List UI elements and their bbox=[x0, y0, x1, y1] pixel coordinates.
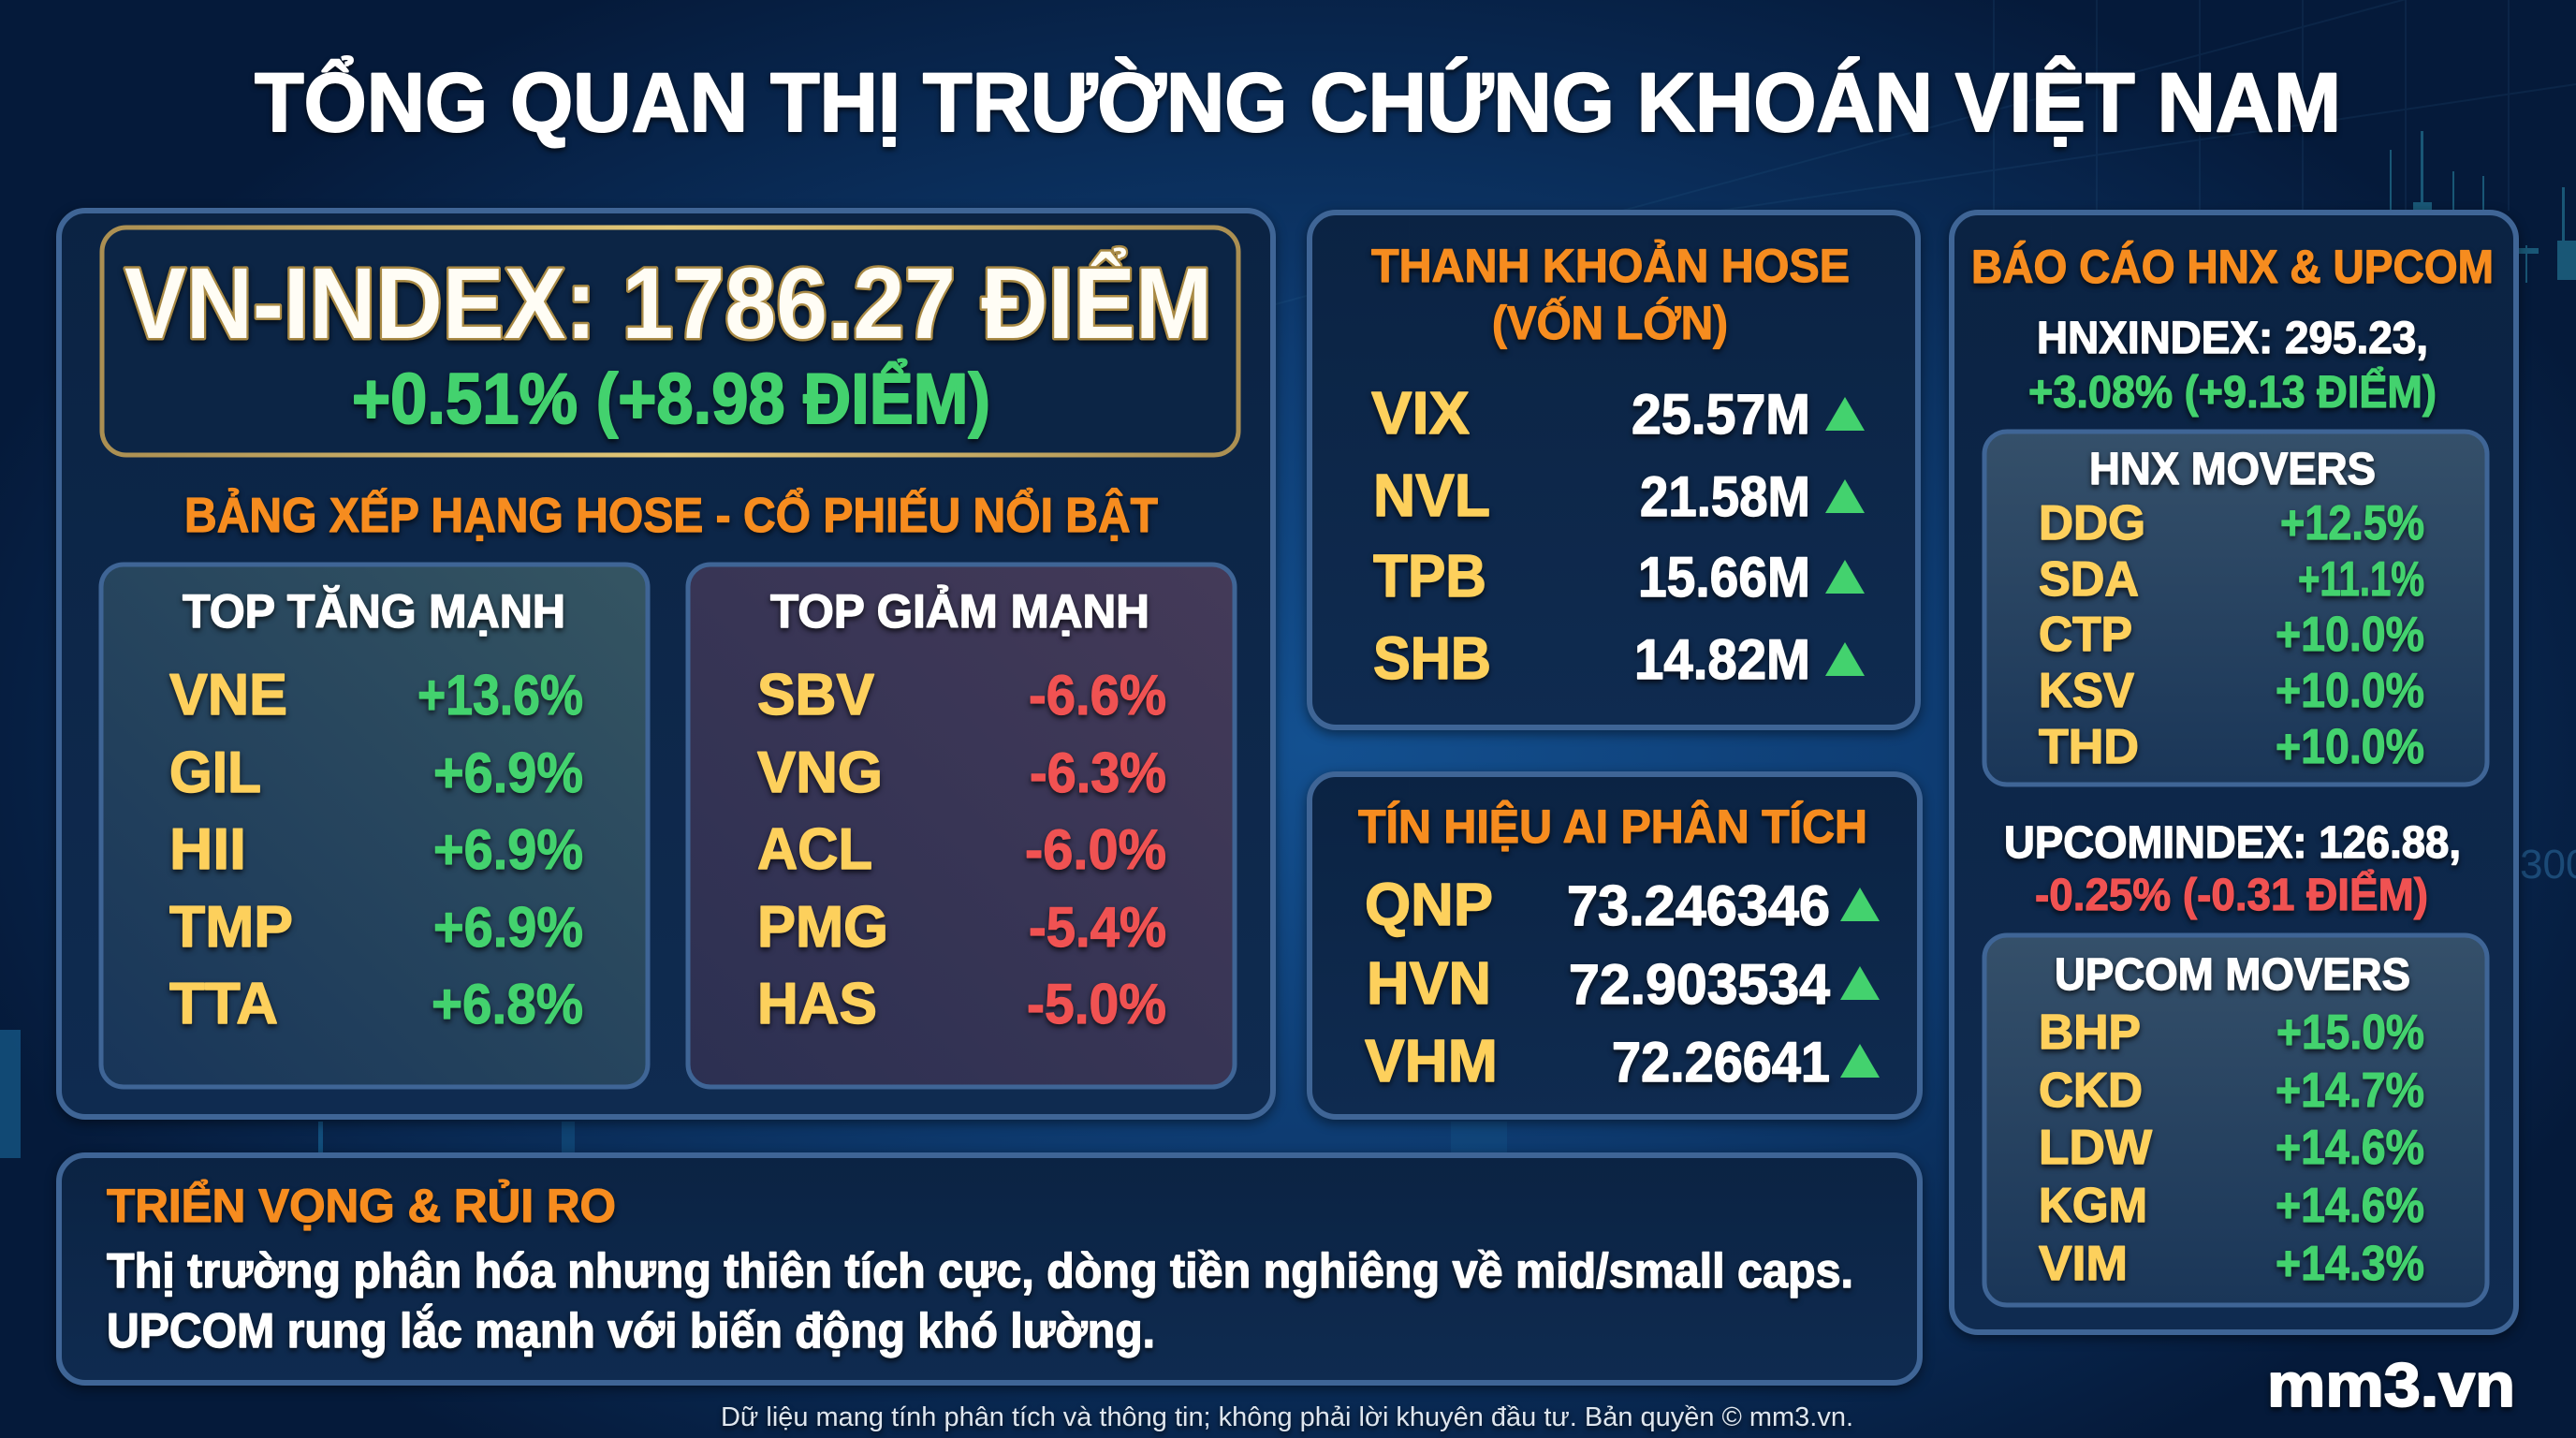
row SDA: SDA bbox=[2039, 552, 2139, 607]
heading: liquidity: (VỐN LỚN) bbox=[1492, 296, 1728, 349]
heading: HNX movers: HNX MOVERS bbox=[2089, 445, 2376, 494]
heading: outlook: TRIỂN VỌNG & RỦI RO bbox=[107, 1179, 616, 1232]
row TPB: TPB bbox=[1373, 542, 1486, 609]
row KGM: +14.6% bbox=[2276, 1179, 2424, 1233]
row LDW: +14.6% bbox=[2276, 1121, 2424, 1175]
row HII: HII bbox=[169, 817, 246, 882]
row BHP bbox=[2039, 1005, 2424, 1060]
row HVN bbox=[1367, 949, 1880, 1017]
row ACL: -6.0% bbox=[1025, 818, 1166, 881]
row THD: THD bbox=[2039, 720, 2139, 774]
row SBV: -6.6% bbox=[1029, 664, 1166, 726]
row DDG: DDG bbox=[2039, 496, 2145, 550]
row CKD: +14.7% bbox=[2276, 1064, 2424, 1118]
panel: top losers bbox=[688, 565, 1235, 1087]
row VIX bbox=[1371, 379, 1865, 447]
row LDW: LDW bbox=[2039, 1121, 2153, 1175]
row PMG: PMG bbox=[757, 895, 888, 960]
row THD: +10.0% bbox=[2276, 720, 2424, 774]
row TMP: +6.9% bbox=[433, 896, 583, 959]
row VHM: VHM bbox=[1365, 1027, 1498, 1094]
row DDG bbox=[2039, 496, 2424, 550]
row KSV: +10.0% bbox=[2276, 664, 2424, 718]
row HAS: HAS bbox=[757, 972, 877, 1036]
row TTA: TTA bbox=[169, 972, 278, 1036]
heading: report: BÁO CÁO HNX & UPCOM bbox=[1971, 241, 2494, 293]
row GIL: GIL bbox=[169, 741, 261, 805]
row TMP: TMP bbox=[169, 895, 293, 960]
row HAS: -5.0% bbox=[1027, 973, 1166, 1035]
UPCOMINDEX summary: UPCOMINDEX: 126.88, bbox=[2004, 818, 2461, 868]
brand logo: mm3.vn bbox=[2267, 1350, 2515, 1419]
row PMG: -5.4% bbox=[1029, 896, 1166, 959]
UPCOMINDEX summary: -0.25% (-0.31 ĐIỂM) bbox=[2035, 870, 2428, 920]
VN-Index callout bbox=[102, 227, 1238, 455]
row HII: +6.9% bbox=[433, 818, 583, 881]
panel: top gainers bbox=[101, 565, 648, 1087]
row VIM bbox=[2039, 1237, 2424, 1291]
heading: AI signals: TÍN HIỆU AI PHÂN TÍCH bbox=[1358, 800, 1867, 853]
text block: outlook bbox=[107, 1244, 1853, 1358]
row VIX: VIX bbox=[1371, 379, 1470, 447]
row GIL bbox=[169, 741, 583, 805]
row PMG bbox=[757, 895, 1166, 960]
row QNP: 73.246346 bbox=[1567, 874, 1830, 937]
row DDG: +12.5% bbox=[2280, 496, 2424, 550]
row ACL bbox=[757, 817, 1166, 882]
panel: outlook and risks bbox=[59, 1155, 1920, 1383]
row VNG: VNG bbox=[757, 741, 883, 805]
panel: HOSE liquidity bbox=[1310, 213, 1918, 727]
row CTP: +10.0% bbox=[2276, 608, 2424, 662]
row NVL bbox=[1373, 462, 1865, 529]
heading: liquidity: THANH KHOẢN HOSE bbox=[1371, 240, 1850, 292]
row VIM: +14.3% bbox=[2276, 1237, 2424, 1291]
row VNE: VNE bbox=[169, 663, 287, 727]
row NVL: 21.58M bbox=[1640, 465, 1810, 528]
row LDW bbox=[2039, 1121, 2424, 1175]
row HII bbox=[169, 817, 583, 882]
row TMP bbox=[169, 895, 583, 960]
UPCOMINDEX summary bbox=[2004, 818, 2461, 920]
row VHM: 72.26641 bbox=[1612, 1031, 1830, 1093]
row SDA bbox=[2039, 552, 2424, 607]
row BHP: +15.0% bbox=[2276, 1005, 2424, 1060]
heading: UPCOM movers: UPCOM MOVERS bbox=[2055, 950, 2410, 1000]
VN-Index value: VN-INDEX: 1786.27 ĐIỂM bbox=[124, 246, 1212, 360]
row THD bbox=[2039, 720, 2424, 774]
row VIX: 25.57M bbox=[1632, 383, 1810, 446]
row CKD: CKD bbox=[2039, 1064, 2143, 1118]
rankings heading: BẢNG XẾP HẠNG HOSE - CỔ PHIẾU NỔI BẬT bbox=[184, 488, 1158, 543]
row CTP: CTP bbox=[2039, 608, 2132, 662]
row SHB bbox=[1373, 624, 1865, 692]
row TPB: 15.66M bbox=[1638, 546, 1810, 609]
footer disclaimer: Dữ liệu mang tính phân tích và thông tin; không phải lời khuyên đầu tư. Bản quyền © mm3.vn. bbox=[721, 1402, 1853, 1432]
row GIL: +6.9% bbox=[433, 741, 583, 804]
row BHP: BHP bbox=[2039, 1005, 2141, 1060]
row VHM bbox=[1365, 1027, 1880, 1094]
row CTP bbox=[2039, 608, 2424, 662]
row SHB: SHB bbox=[1373, 624, 1491, 692]
row VNE: +13.6% bbox=[417, 664, 583, 726]
row KSV bbox=[2039, 664, 2424, 718]
row ACL: ACL bbox=[757, 817, 872, 882]
row SDA: +11.1% bbox=[2298, 552, 2424, 607]
heading: top gainers: TOP TĂNG MẠNH bbox=[183, 585, 565, 638]
row TPB bbox=[1373, 542, 1865, 609]
row VNG: -6.3% bbox=[1030, 741, 1166, 804]
row SBV bbox=[757, 663, 1166, 727]
heading: liquidity bbox=[1371, 240, 1850, 349]
row VNE bbox=[169, 663, 583, 727]
row TTA: +6.8% bbox=[432, 973, 583, 1035]
heading: top losers: TOP GIẢM MẠNH bbox=[770, 585, 1149, 638]
VN-Index change: +0.51% (+8.98 ĐIỂM) bbox=[352, 359, 990, 439]
row QNP bbox=[1365, 871, 1880, 938]
HNXINDEX summary: HNXINDEX: 295.23, bbox=[2037, 314, 2428, 363]
HNXINDEX summary bbox=[2028, 314, 2437, 418]
text block: outlook: Thị trường phân hóa nhưng thiên tích cực, dòng tiền nghiêng về mid/small caps. bbox=[107, 1244, 1853, 1299]
row VNG bbox=[757, 741, 1166, 805]
panel: AI signals bbox=[1310, 774, 1920, 1117]
row HVN: 72.903534 bbox=[1569, 953, 1831, 1016]
panel: UPCOM movers bbox=[1984, 935, 2487, 1305]
row HVN: HVN bbox=[1367, 949, 1491, 1017]
row TTA bbox=[169, 972, 583, 1036]
row NVL: NVL bbox=[1373, 462, 1490, 529]
row KGM bbox=[2039, 1179, 2424, 1233]
row QNP: QNP bbox=[1365, 871, 1493, 938]
HNXINDEX summary: +3.08% (+9.13 ĐIỂM) bbox=[2028, 367, 2437, 418]
row KGM: KGM bbox=[2039, 1179, 2147, 1233]
text block: outlook: UPCOM rung lắc mạnh với biến động khó lường. bbox=[107, 1303, 1155, 1358]
row KSV: KSV bbox=[2039, 664, 2134, 718]
panel: VN-Index and HOSE rankings bbox=[59, 211, 1273, 1117]
title: TỔNG QUAN THỊ TRƯỜNG CHỨNG KHOÁN VIỆT NAM bbox=[255, 55, 2341, 149]
row HAS bbox=[757, 972, 1166, 1036]
panel: HNX movers bbox=[1984, 432, 2487, 785]
row SBV: SBV bbox=[757, 663, 874, 727]
row CKD bbox=[2039, 1064, 2424, 1118]
row VIM: VIM bbox=[2039, 1237, 2128, 1291]
panel: HNX and UPCOM report bbox=[1952, 213, 2516, 1332]
row SHB: 14.82M bbox=[1634, 628, 1810, 691]
